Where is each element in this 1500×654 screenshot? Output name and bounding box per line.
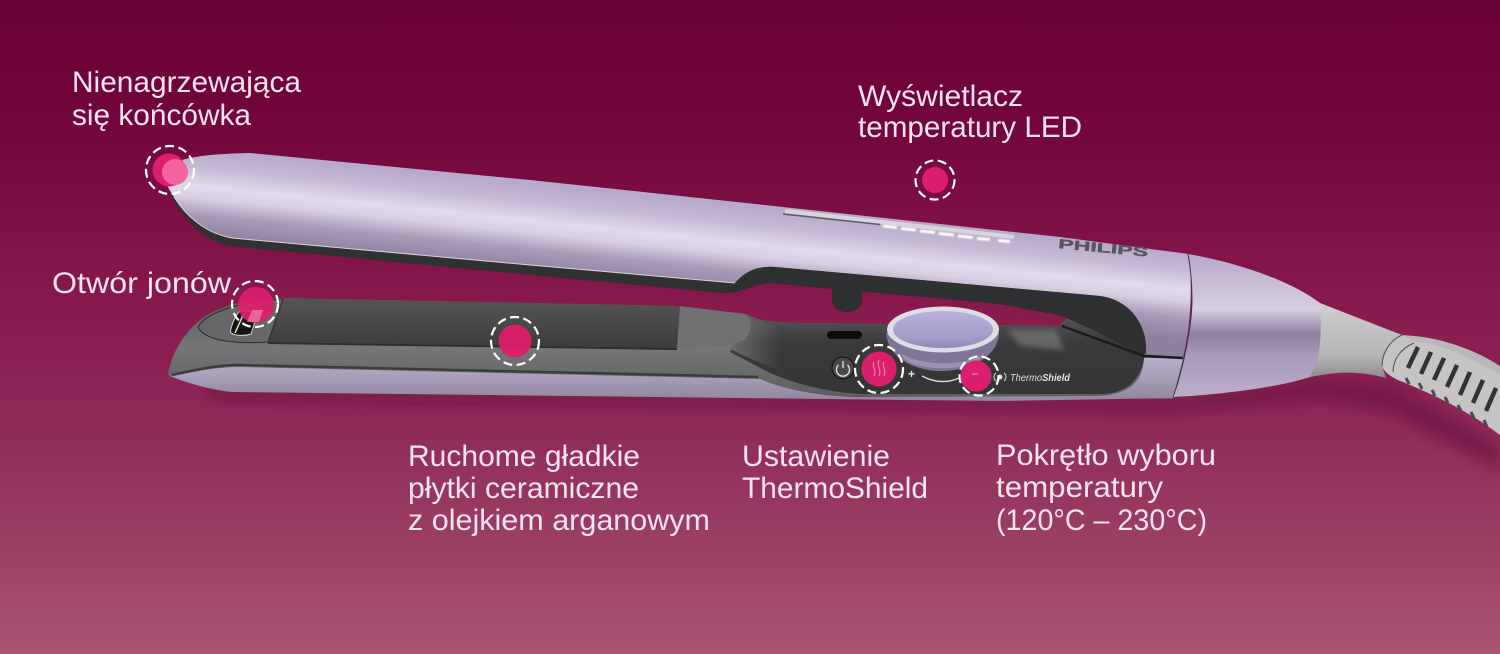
marker: ceramic plates xyxy=(491,317,539,365)
label: ceramic plates: z olejkiem arganowym xyxy=(408,504,710,537)
straightener illustration xyxy=(164,153,1500,435)
plate tip recess xyxy=(198,299,283,343)
panel left fade xyxy=(722,318,780,372)
gap stopper peg xyxy=(832,287,862,312)
ion outlet xyxy=(231,311,258,335)
label: ceramic plates xyxy=(408,440,710,537)
power button xyxy=(832,357,854,379)
label: LED display: temperatury LED xyxy=(858,111,1082,144)
dark strip under upper arm xyxy=(170,193,1146,356)
cord ribs xyxy=(1408,347,1496,411)
dark line above strip xyxy=(172,365,758,377)
temperature dial xyxy=(886,306,999,371)
label: LED display xyxy=(858,80,1082,144)
plus symbol: + xyxy=(908,367,915,381)
label: non-heating tip: Nienagrzewająca xyxy=(72,66,302,99)
panel highlight xyxy=(1008,330,1064,350)
shadow under device xyxy=(200,378,1500,470)
label: ceramic plates: płytki ceramiczne xyxy=(408,472,639,505)
label: non-heating tip: się końcówka xyxy=(72,99,252,132)
marker: tip xyxy=(146,146,194,194)
lilac lower strip xyxy=(170,358,1183,401)
PHILIPS logo: PHILIPS xyxy=(1058,236,1149,260)
label: LED display: Wyświetlacz xyxy=(858,80,1023,113)
head cone xyxy=(1173,254,1321,397)
label: non-heating tip xyxy=(72,66,302,132)
plate end cap xyxy=(676,306,750,348)
label: ThermoShield xyxy=(742,440,928,505)
label: temperature dial: temperatury xyxy=(996,471,1163,504)
label: ion outlet: Otwór jonów xyxy=(52,267,232,300)
temperature arrow xyxy=(922,376,959,382)
handle slit xyxy=(1062,326,1183,358)
upper arm lilac shell xyxy=(164,153,1191,357)
label: ThermoShield: ThermoShield xyxy=(742,472,928,505)
rear dark handle xyxy=(735,267,1146,354)
label: temperature dial: Pokrętło wyboru xyxy=(996,439,1216,472)
tip highlight line xyxy=(174,197,735,283)
ThermoShield badge: ThermoShield xyxy=(1010,373,1071,384)
marker: ThermoShield xyxy=(855,345,903,393)
power cord xyxy=(1310,303,1500,435)
marker: temperature dial xyxy=(960,356,998,396)
label: ceramic plates: Ruchome gładkie xyxy=(408,440,640,473)
ceramic plate xyxy=(268,298,680,348)
marker: ion outlet xyxy=(232,281,278,327)
dark control panel xyxy=(730,308,1145,394)
label: ThermoShield: Ustawienie xyxy=(742,440,890,473)
label: temperature dial xyxy=(996,439,1216,537)
lower arm base xyxy=(168,298,1184,399)
marker: LED display xyxy=(916,160,954,200)
vent slot xyxy=(827,331,862,339)
label: temperature dial: (120°C – 230°C) xyxy=(996,504,1207,537)
LED temperature display xyxy=(783,211,1014,242)
